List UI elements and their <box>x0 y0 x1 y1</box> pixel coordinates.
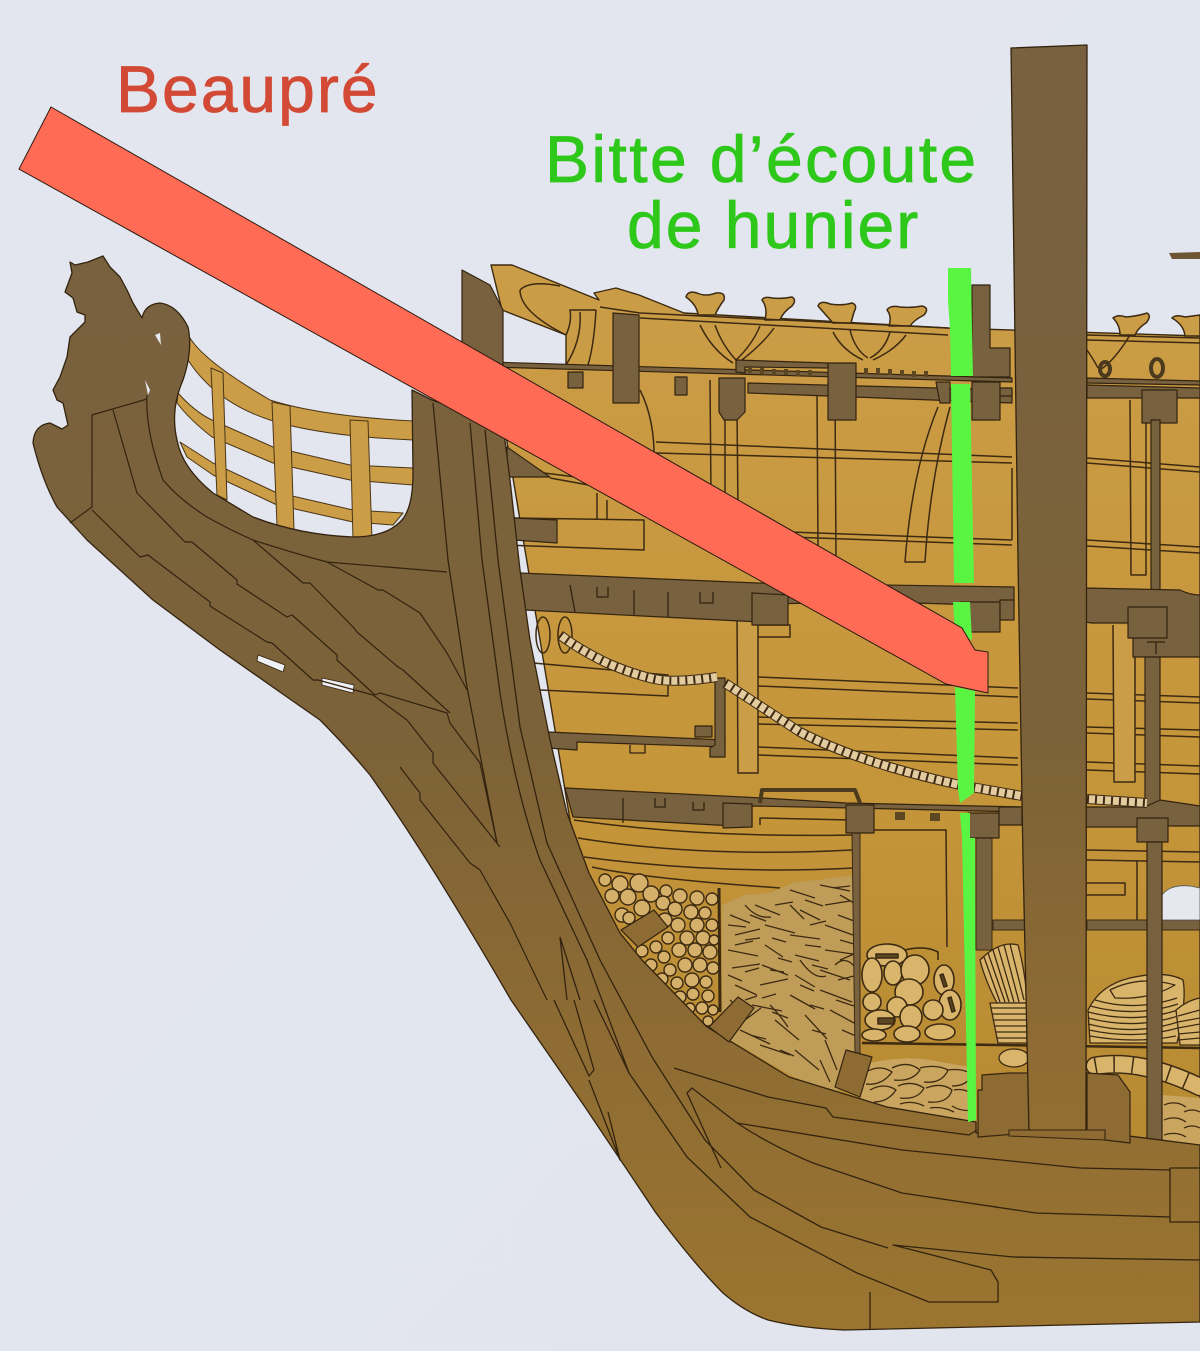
head plank lines <box>70 395 547 1000</box>
deck arch handle <box>760 790 860 803</box>
anchor cable on hold floor <box>1095 1064 1200 1087</box>
rope coil left <box>980 944 1027 1043</box>
dark structural beams and blocks <box>490 285 1200 1145</box>
figurehead gaps <box>145 333 161 395</box>
mid-deck fittings <box>533 610 1200 920</box>
ornamental rail knobs <box>686 292 1200 336</box>
hawser rope <box>560 635 1147 803</box>
shelf <box>862 1043 1200 1048</box>
mast base plate <box>1009 1130 1105 1140</box>
ballast stones <box>855 1058 975 1125</box>
main mast <box>1011 45 1087 1132</box>
ring bolts <box>1100 359 1163 377</box>
upper rail and braces <box>520 284 1200 370</box>
label: Bitte d'écoute de hunier <box>545 122 979 262</box>
barrel beside mast <box>999 1049 1029 1067</box>
ballast riders <box>621 910 1130 1143</box>
head rails <box>177 338 413 540</box>
green topsail sheet bitt highlight <box>948 268 976 1122</box>
capstan rack teeth <box>748 367 940 821</box>
belaying rail stub right <box>1169 252 1200 259</box>
ballast hay pile <box>722 875 860 1095</box>
stem and lower hull plank lines <box>433 403 1200 1329</box>
knees and strakes <box>505 380 1200 575</box>
red bowsprit highlight <box>19 107 988 693</box>
beam dividers and tabs <box>570 585 1165 823</box>
hold floor stones right <box>1162 1095 1200 1146</box>
stern post above rail <box>462 270 503 370</box>
rope coil right <box>1088 974 1200 1045</box>
upper bulwark and interior planking <box>491 265 1200 1160</box>
hawse holes <box>257 655 354 693</box>
white cloth <box>1162 886 1200 920</box>
label line 1: Bitte d’écoute <box>545 122 979 196</box>
hull with head and figurehead <box>33 256 1200 1330</box>
label line 2: de hunier <box>627 188 920 262</box>
vertical hold posts <box>852 833 1200 1053</box>
label: Beaupré: Beaupré <box>116 52 380 126</box>
cauldron pile <box>862 944 961 1042</box>
firewood pile <box>599 874 719 1026</box>
wood pile divider <box>719 888 720 1012</box>
lower curved strakes <box>574 818 947 947</box>
